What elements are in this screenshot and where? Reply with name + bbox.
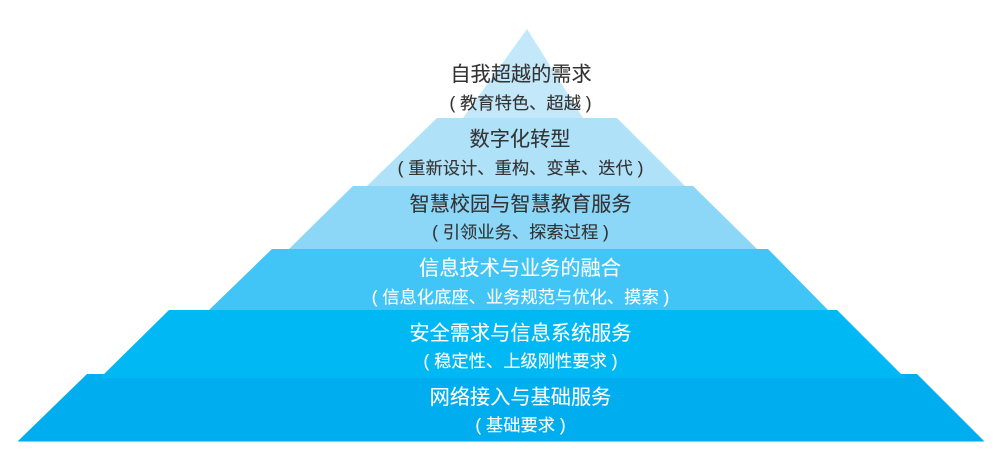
tier 3 label: 智慧校园与智慧教育服务 bbox=[409, 193, 632, 216]
tier 4 shape bbox=[209, 249, 828, 310]
tier 6 label: ( 基础要求 ) bbox=[475, 415, 566, 435]
tier 2 shape bbox=[367, 118, 685, 186]
tier 5 shape bbox=[100, 310, 905, 378]
tier 1 label: ( 教育特色、超越 ) bbox=[449, 93, 592, 113]
tier 6 shape: base bbox=[18, 374, 984, 441]
tier 3 label bbox=[409, 193, 632, 242]
tier 1 shape: apex bbox=[463, 29, 583, 118]
tier 1 label: 自我超越的需求 bbox=[450, 63, 592, 86]
tier 5 label: 安全需求与信息系统服务 bbox=[409, 322, 632, 345]
tier 2 label: ( 重新设计、重构、变革、迭代 ) bbox=[398, 158, 643, 178]
tier 3 label: ( 引领业务、探索过程 ) bbox=[432, 222, 609, 242]
tier 4 label bbox=[372, 257, 669, 307]
tier 2 label: 数字化转型 bbox=[470, 128, 570, 151]
tier 2 label bbox=[398, 128, 643, 178]
tier 6 label bbox=[430, 386, 611, 435]
tier 5 label: ( 稳定性、上级刚性要求 ) bbox=[424, 351, 617, 371]
tier 5 label bbox=[409, 322, 632, 371]
tier 3 shape bbox=[289, 186, 757, 249]
tier 4 label: ( 信息化底座、业务规范与优化、摸索 ) bbox=[372, 287, 669, 307]
tier 6 label: 网络接入与基础服务 bbox=[430, 386, 611, 409]
tier 1 label bbox=[449, 63, 592, 113]
tier 4 label: 信息技术与业务的融合 bbox=[419, 257, 621, 280]
